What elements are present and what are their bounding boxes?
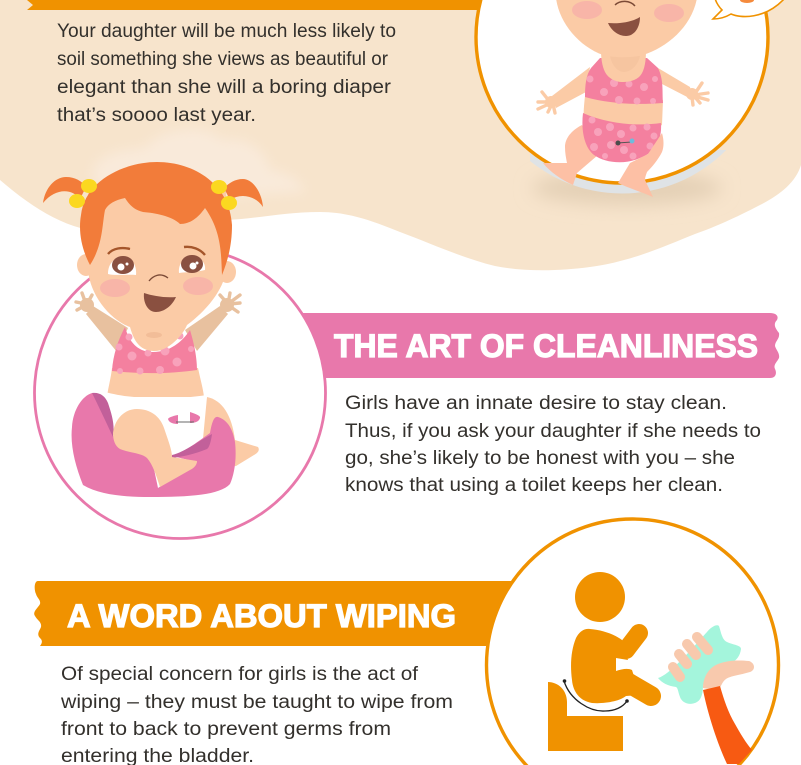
neck shadow bbox=[610, 56, 640, 72]
orange circle bbox=[486, 519, 778, 765]
ears bbox=[77, 254, 236, 283]
right leg and foot bbox=[618, 133, 664, 197]
swimsuit bottom bbox=[582, 113, 661, 162]
chin shadow bbox=[146, 332, 162, 338]
sleeve bbox=[703, 686, 752, 764]
diaper bbox=[102, 391, 207, 455]
potty inner shade bbox=[92, 393, 212, 458]
left arm and hand bbox=[76, 293, 128, 352]
head bbox=[88, 190, 226, 351]
text: section three body: front to back to prevent germs from bbox=[61, 719, 391, 740]
text: section one body: that’s soooo last year. bbox=[57, 105, 256, 126]
eyes bbox=[108, 255, 205, 275]
torso skin bbox=[584, 96, 663, 150]
text: section one body bbox=[57, 21, 396, 126]
face bbox=[556, 0, 697, 57]
right arm and hand bbox=[658, 68, 708, 105]
midriff bbox=[107, 368, 204, 397]
grey plate rim bbox=[530, 150, 726, 194]
illustration: baby in polka dot swimsuit bbox=[476, 0, 785, 205]
child head bbox=[575, 572, 625, 622]
left leg and foot bbox=[543, 125, 598, 185]
text: section two body: Girls have an innate desire to stay clean. bbox=[345, 393, 727, 414]
child body bbox=[571, 629, 651, 703]
cheeks bbox=[572, 1, 684, 22]
diaper tab bbox=[168, 412, 200, 424]
text: section two body: Thus, if you ask your daughter if she needs to bbox=[345, 421, 761, 442]
text: section one body: elegant than she will a boring diaper bbox=[57, 77, 392, 98]
text: section one body: Your daughter will be much less likely to bbox=[57, 21, 396, 42]
orange circle bbox=[476, 0, 768, 183]
cloud behind the girl's head bbox=[92, 129, 306, 196]
hair bows bbox=[69, 179, 237, 210]
back leg and foot bbox=[200, 397, 259, 470]
title: the art of cleanliness: THE ART OF CLEANLINESS bbox=[334, 328, 758, 364]
title: a word about wiping: A WORD ABOUT WIPING bbox=[67, 598, 456, 634]
banner: top orange ribbon bbox=[27, 0, 482, 10]
text: section one body: soil something she views as beautiful or bbox=[57, 49, 389, 70]
potty seat bbox=[548, 682, 623, 751]
left arm and hand bbox=[538, 67, 590, 113]
pink circle bbox=[34, 248, 326, 538]
neck bbox=[601, 50, 646, 82]
text: section three body: wiping – they must be taught to wipe from bbox=[60, 692, 453, 713]
shadow under circle bbox=[532, 171, 722, 205]
eyebrows bbox=[108, 247, 205, 255]
nose bbox=[149, 275, 168, 281]
text: section three body: Of special concern for girls is the act of bbox=[61, 664, 419, 685]
right arm and hand bbox=[185, 293, 240, 351]
swimsuit top bbox=[112, 327, 197, 373]
pigtails bbox=[43, 177, 263, 207]
nose bbox=[615, 1, 635, 6]
text: section two body: go, she’s likely to be honest with you – she bbox=[345, 448, 735, 469]
speech bubble bbox=[713, 0, 785, 19]
fingers bbox=[673, 637, 708, 677]
illustration: girl on pink potty bbox=[34, 162, 326, 538]
hair bbox=[80, 162, 232, 275]
text: section two body bbox=[345, 393, 761, 496]
tissue bbox=[658, 625, 741, 704]
front leg bbox=[113, 409, 197, 487]
panel: wiping ribbon bbox=[34, 581, 520, 646]
cheeks bbox=[100, 277, 213, 297]
panel: cleanliness ribbon bbox=[280, 313, 779, 378]
panel: beige wave background bbox=[0, 0, 801, 270]
illustration: wiping icon bbox=[486, 519, 778, 765]
text: section three body bbox=[60, 664, 453, 765]
text: section two body: knows that using a toilet keeps her clean. bbox=[345, 475, 723, 496]
wiping direction arrow bbox=[563, 679, 629, 711]
swimsuit top bbox=[585, 58, 663, 104]
thumb and palm bbox=[703, 660, 754, 689]
potty bbox=[72, 393, 236, 497]
mouth bbox=[608, 17, 640, 36]
mouth bbox=[144, 293, 176, 312]
safety pin bbox=[616, 138, 634, 146]
